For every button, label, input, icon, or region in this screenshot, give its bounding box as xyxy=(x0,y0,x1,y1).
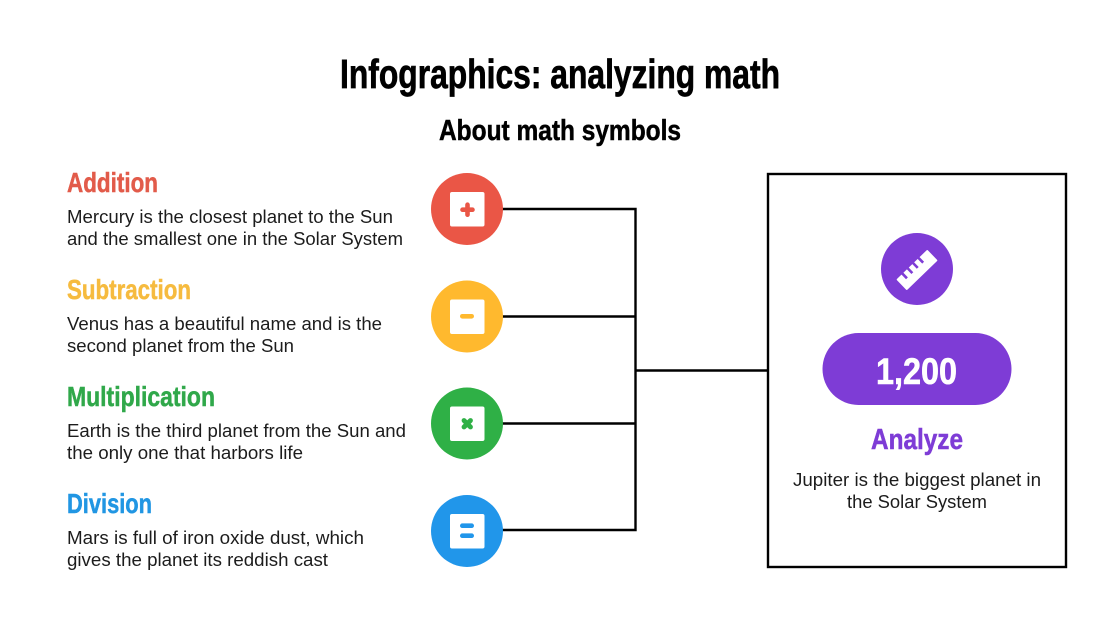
text block: addition: and the smallest one in the Solar System xyxy=(67,229,403,249)
text block: division: gives the planet its reddish cast xyxy=(67,550,328,570)
text block: subtraction: Subtraction xyxy=(67,274,191,305)
icon: multiply xyxy=(431,388,503,460)
panel description xyxy=(793,470,1041,512)
text block: division: Mars is full of iron oxide dust, which xyxy=(67,528,364,548)
text block: multiplication xyxy=(67,381,406,463)
text block: subtraction xyxy=(67,274,382,356)
panel: analyze xyxy=(768,174,1066,567)
icon: plus xyxy=(431,173,503,245)
text block: division: Division xyxy=(67,488,152,519)
title: Infographics: analyzing math xyxy=(340,51,780,97)
connector lines xyxy=(502,209,768,530)
icon: minus xyxy=(431,280,503,352)
subtitle: About math symbols xyxy=(439,115,681,147)
text block: multiplication: Multiplication xyxy=(67,381,215,412)
text block: multiplication: Earth is the third planet from the Sun and xyxy=(67,421,406,441)
text block: multiplication: the only one that harbors life xyxy=(67,443,303,463)
icon: ruler xyxy=(881,233,953,305)
panel description: Jupiter is the biggest planet in xyxy=(793,470,1041,490)
text block: subtraction: Venus has a beautiful name and is the xyxy=(67,314,382,334)
value pill xyxy=(822,333,1012,405)
value pill: 1,200 xyxy=(876,351,957,392)
text block: subtraction: second planet from the Sun xyxy=(67,336,294,356)
text block: division xyxy=(67,488,364,570)
text block: addition: Addition xyxy=(67,167,158,198)
text block: addition: Mercury is the closest planet to the Sun xyxy=(67,207,393,227)
text block: addition xyxy=(67,167,403,249)
icon: divide xyxy=(431,495,503,567)
panel heading: Analyze xyxy=(871,424,963,456)
panel description: the Solar System xyxy=(847,492,987,512)
